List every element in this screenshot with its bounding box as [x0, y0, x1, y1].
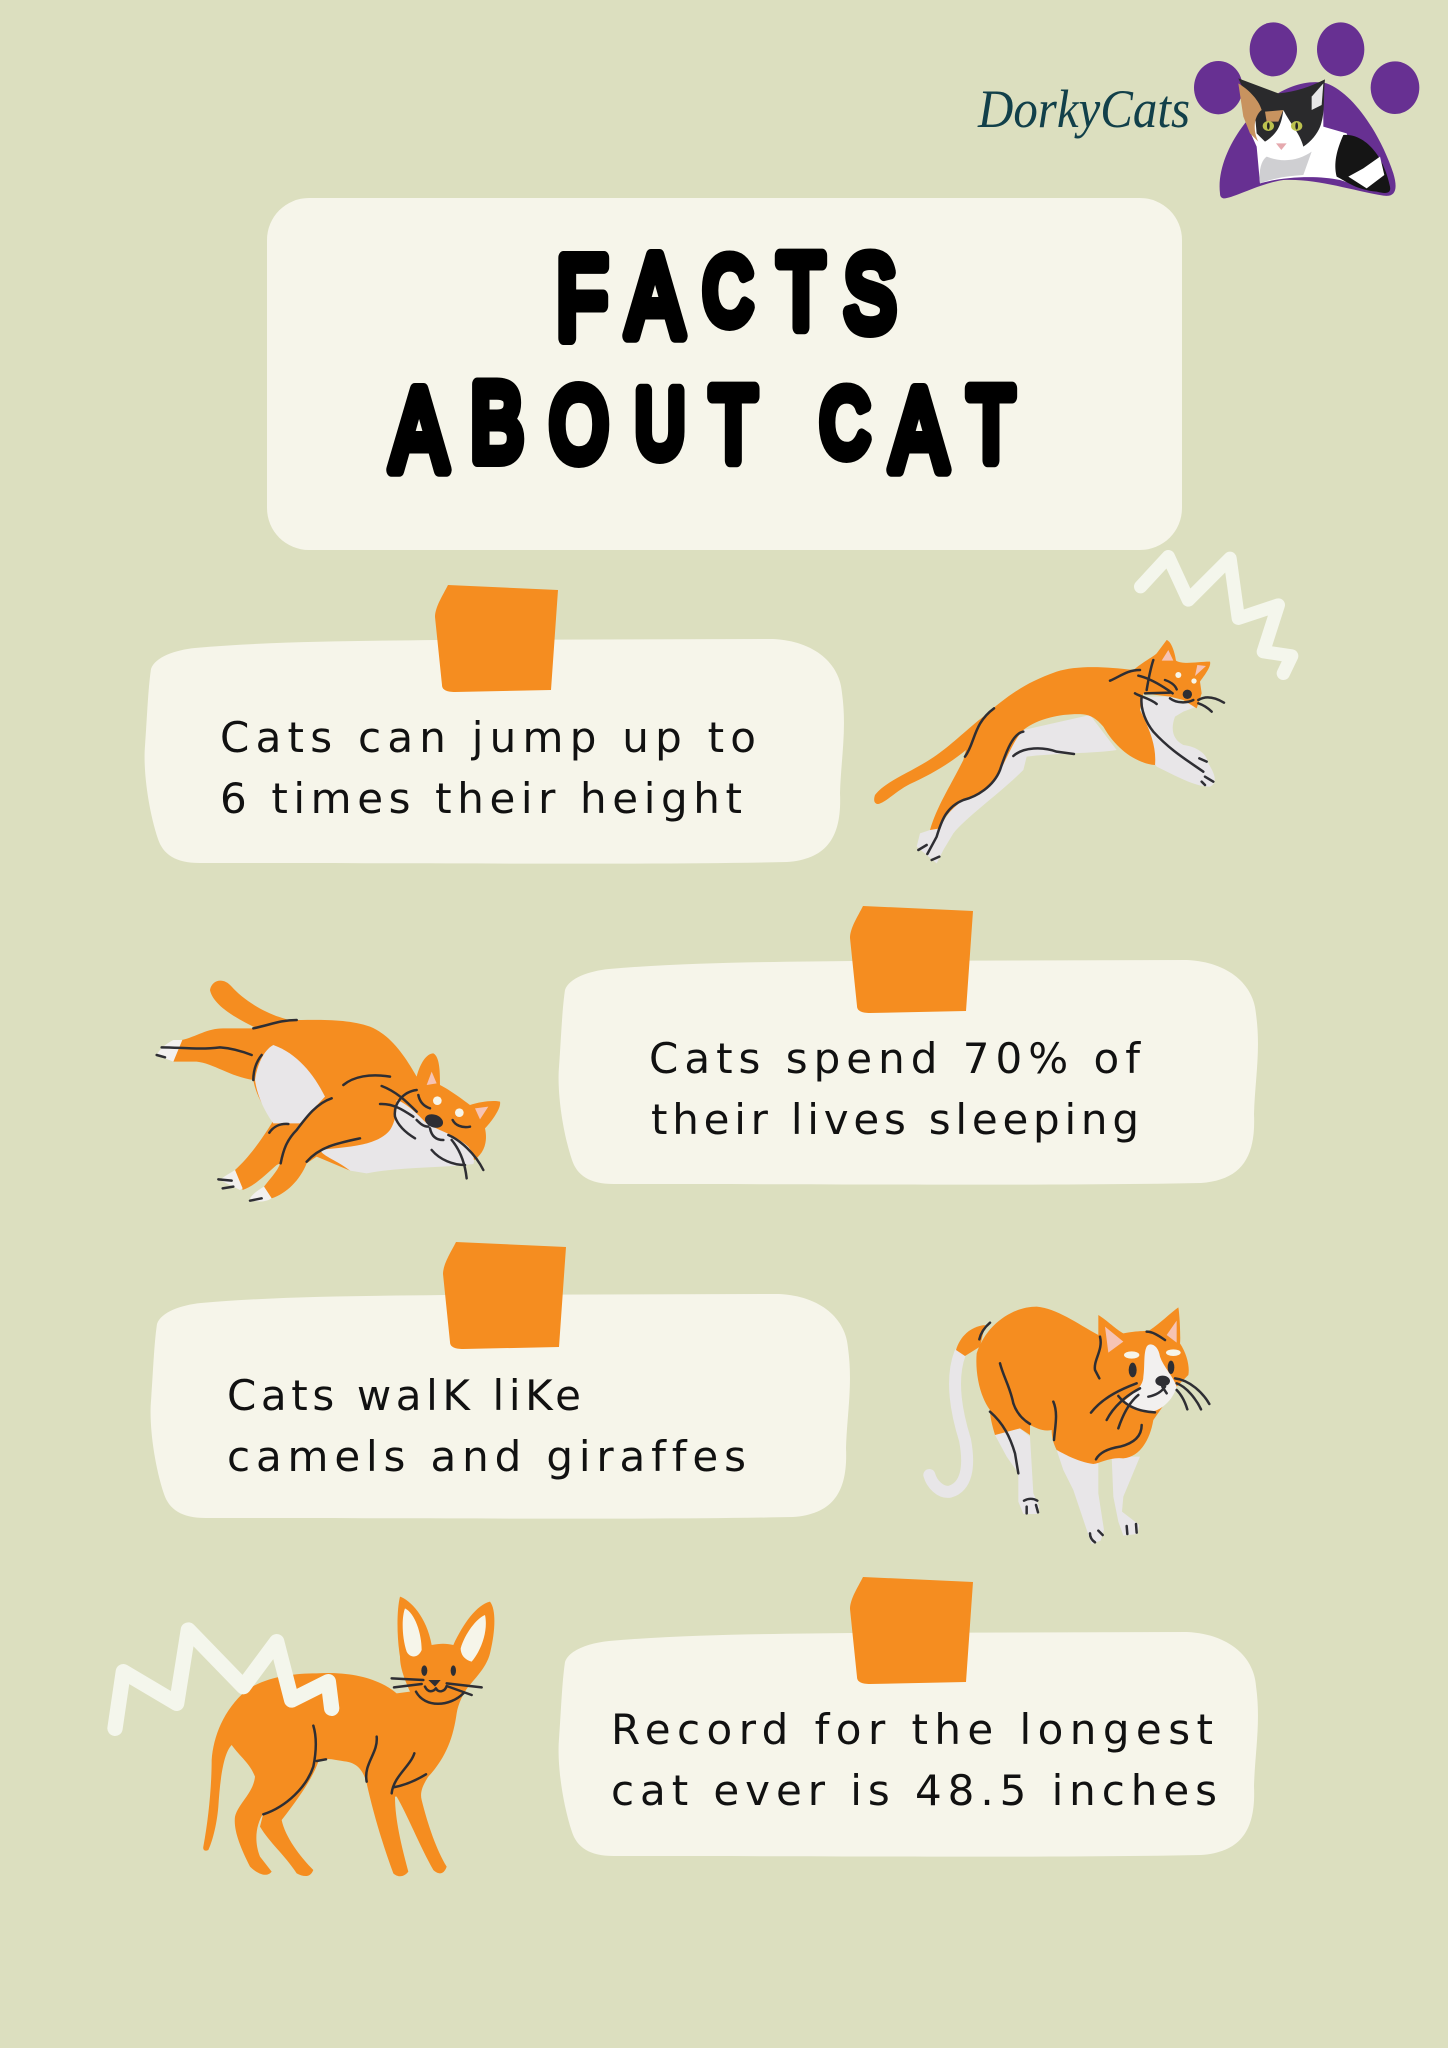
fact text 4: Record for the longest — [611, 1705, 1213, 1754]
title: ABOUT CAT: U — [635, 370, 685, 477]
zigzag: top right — [1141, 557, 1292, 673]
fact text 1: Cats can jump up to — [220, 713, 756, 762]
fact text 3: camels and giraffes — [227, 1432, 746, 1481]
title: FACTS: F — [556, 235, 607, 363]
title: FACTS: S — [844, 234, 896, 353]
title: ABOUT CAT: A — [391, 367, 447, 495]
fact text 2: their lives sleeping — [651, 1095, 1139, 1144]
tape 3 — [443, 1242, 566, 1349]
title: FACTS: T — [778, 234, 824, 350]
cat 2: sleeping — [157, 981, 500, 1201]
title: FACTS: A — [627, 233, 683, 361]
title: ABOUT CAT: B — [471, 361, 523, 484]
fact text 4: cat ever is 48.5 inches — [611, 1766, 1217, 1815]
title: ABOUT CAT: O — [550, 368, 608, 483]
zigzag: bottom left — [115, 1630, 332, 1728]
fact text 1: 6 times their height — [220, 774, 742, 823]
fact card 2 — [559, 906, 1258, 1185]
logo: DorkyCats — [977, 22, 1419, 198]
icon: paw with cat portrait — [1194, 22, 1419, 198]
cat 3: standing — [929, 1307, 1209, 1544]
title: ABOUT CAT: T — [711, 367, 756, 483]
fact text 2: Cats spend 70% of — [649, 1034, 1141, 1083]
fact text 3: Cats walK liKe — [227, 1371, 581, 1420]
fact card 1 — [145, 585, 844, 864]
title: ABOUT CAT: A — [891, 367, 947, 495]
cat 4: big ears — [203, 1597, 494, 1876]
fact card 3 — [151, 1242, 850, 1519]
tape 4 — [850, 1577, 973, 1684]
title panel — [267, 198, 1182, 550]
tape 1 — [435, 585, 558, 692]
logo wordmark: DorkyCats — [977, 79, 1190, 139]
title: ABOUT CAT: T — [968, 367, 1014, 483]
title: ABOUT CAT: C — [821, 371, 869, 476]
fact card 4 — [559, 1577, 1258, 1857]
title: FACTS: C — [704, 239, 752, 344]
tape 2 — [850, 906, 973, 1013]
cat 1: leaping — [874, 640, 1224, 863]
